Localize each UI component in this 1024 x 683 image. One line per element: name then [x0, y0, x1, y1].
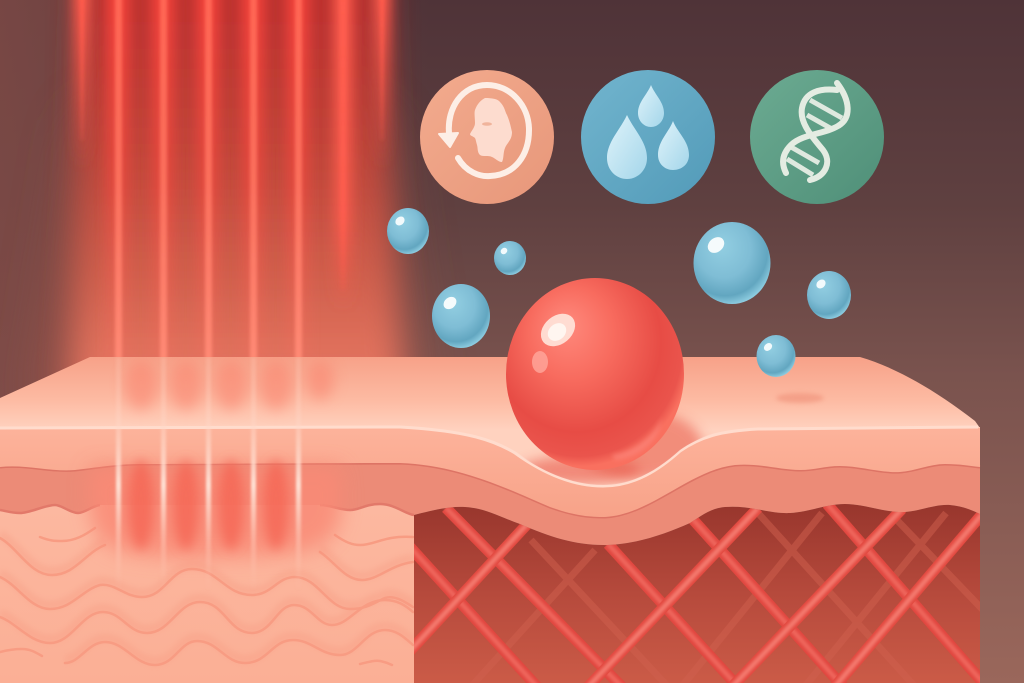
front upper skin layer — [0, 426, 980, 517]
band red glow — [88, 466, 342, 558]
wave strokes — [0, 528, 413, 665]
wave shading — [0, 534, 413, 661]
beams through skin — [116, 357, 301, 590]
bubble 4 — [694, 222, 770, 304]
right drop — [658, 121, 689, 170]
red light beams — [40, 0, 420, 420]
sphere body — [506, 278, 684, 470]
top surface of skin — [0, 357, 980, 485]
bubble 3 — [432, 284, 490, 348]
sphere highlight — [534, 307, 582, 353]
collagen fibers ascending — [409, 508, 984, 683]
helix rungs — [787, 100, 842, 175]
red sphere — [506, 278, 702, 484]
bright front edge highlight — [0, 427, 978, 486]
sphere secondary highlight — [532, 351, 548, 373]
redness blobs between beams — [128, 460, 289, 550]
bubble 1 — [387, 208, 429, 254]
bubble 5 — [807, 271, 851, 319]
fiber highlights descending — [410, 504, 985, 683]
outer faded beams — [74, 0, 390, 310]
collagen fibers descending — [410, 504, 985, 683]
bubble 2 — [494, 241, 526, 275]
bubble 6 — [756, 335, 796, 377]
beam cores — [80, 0, 384, 360]
sphere lower reflection — [612, 418, 662, 460]
faint background fibers — [517, 511, 980, 632]
face profile — [470, 98, 512, 162]
top drop — [638, 85, 664, 127]
fiber highlights ascending — [409, 508, 984, 683]
large drop — [607, 115, 647, 179]
inner beam haze — [70, 0, 405, 420]
band bottom line — [0, 504, 414, 515]
beam glows — [107, 0, 309, 360]
arrow head — [439, 133, 458, 147]
light through skin — [88, 357, 342, 590]
icon: DNA helix — [750, 70, 884, 204]
right deep tissue panel — [409, 500, 985, 683]
circular arrow — [449, 85, 529, 176]
pink band layer — [0, 463, 980, 545]
panel: skin block — [0, 357, 985, 683]
water bubbles — [387, 208, 851, 377]
helix strands — [783, 83, 848, 180]
icon: water drops — [581, 70, 715, 204]
icon: face renewal — [420, 70, 554, 204]
outer beam haze — [40, 120, 420, 420]
sphere shadow — [520, 411, 702, 484]
bubble shadow on skin — [776, 393, 824, 403]
band top line — [0, 463, 980, 517]
surface redness between beams — [124, 360, 334, 410]
left dermis block — [0, 500, 414, 683]
wavy collagen lines — [0, 528, 413, 665]
